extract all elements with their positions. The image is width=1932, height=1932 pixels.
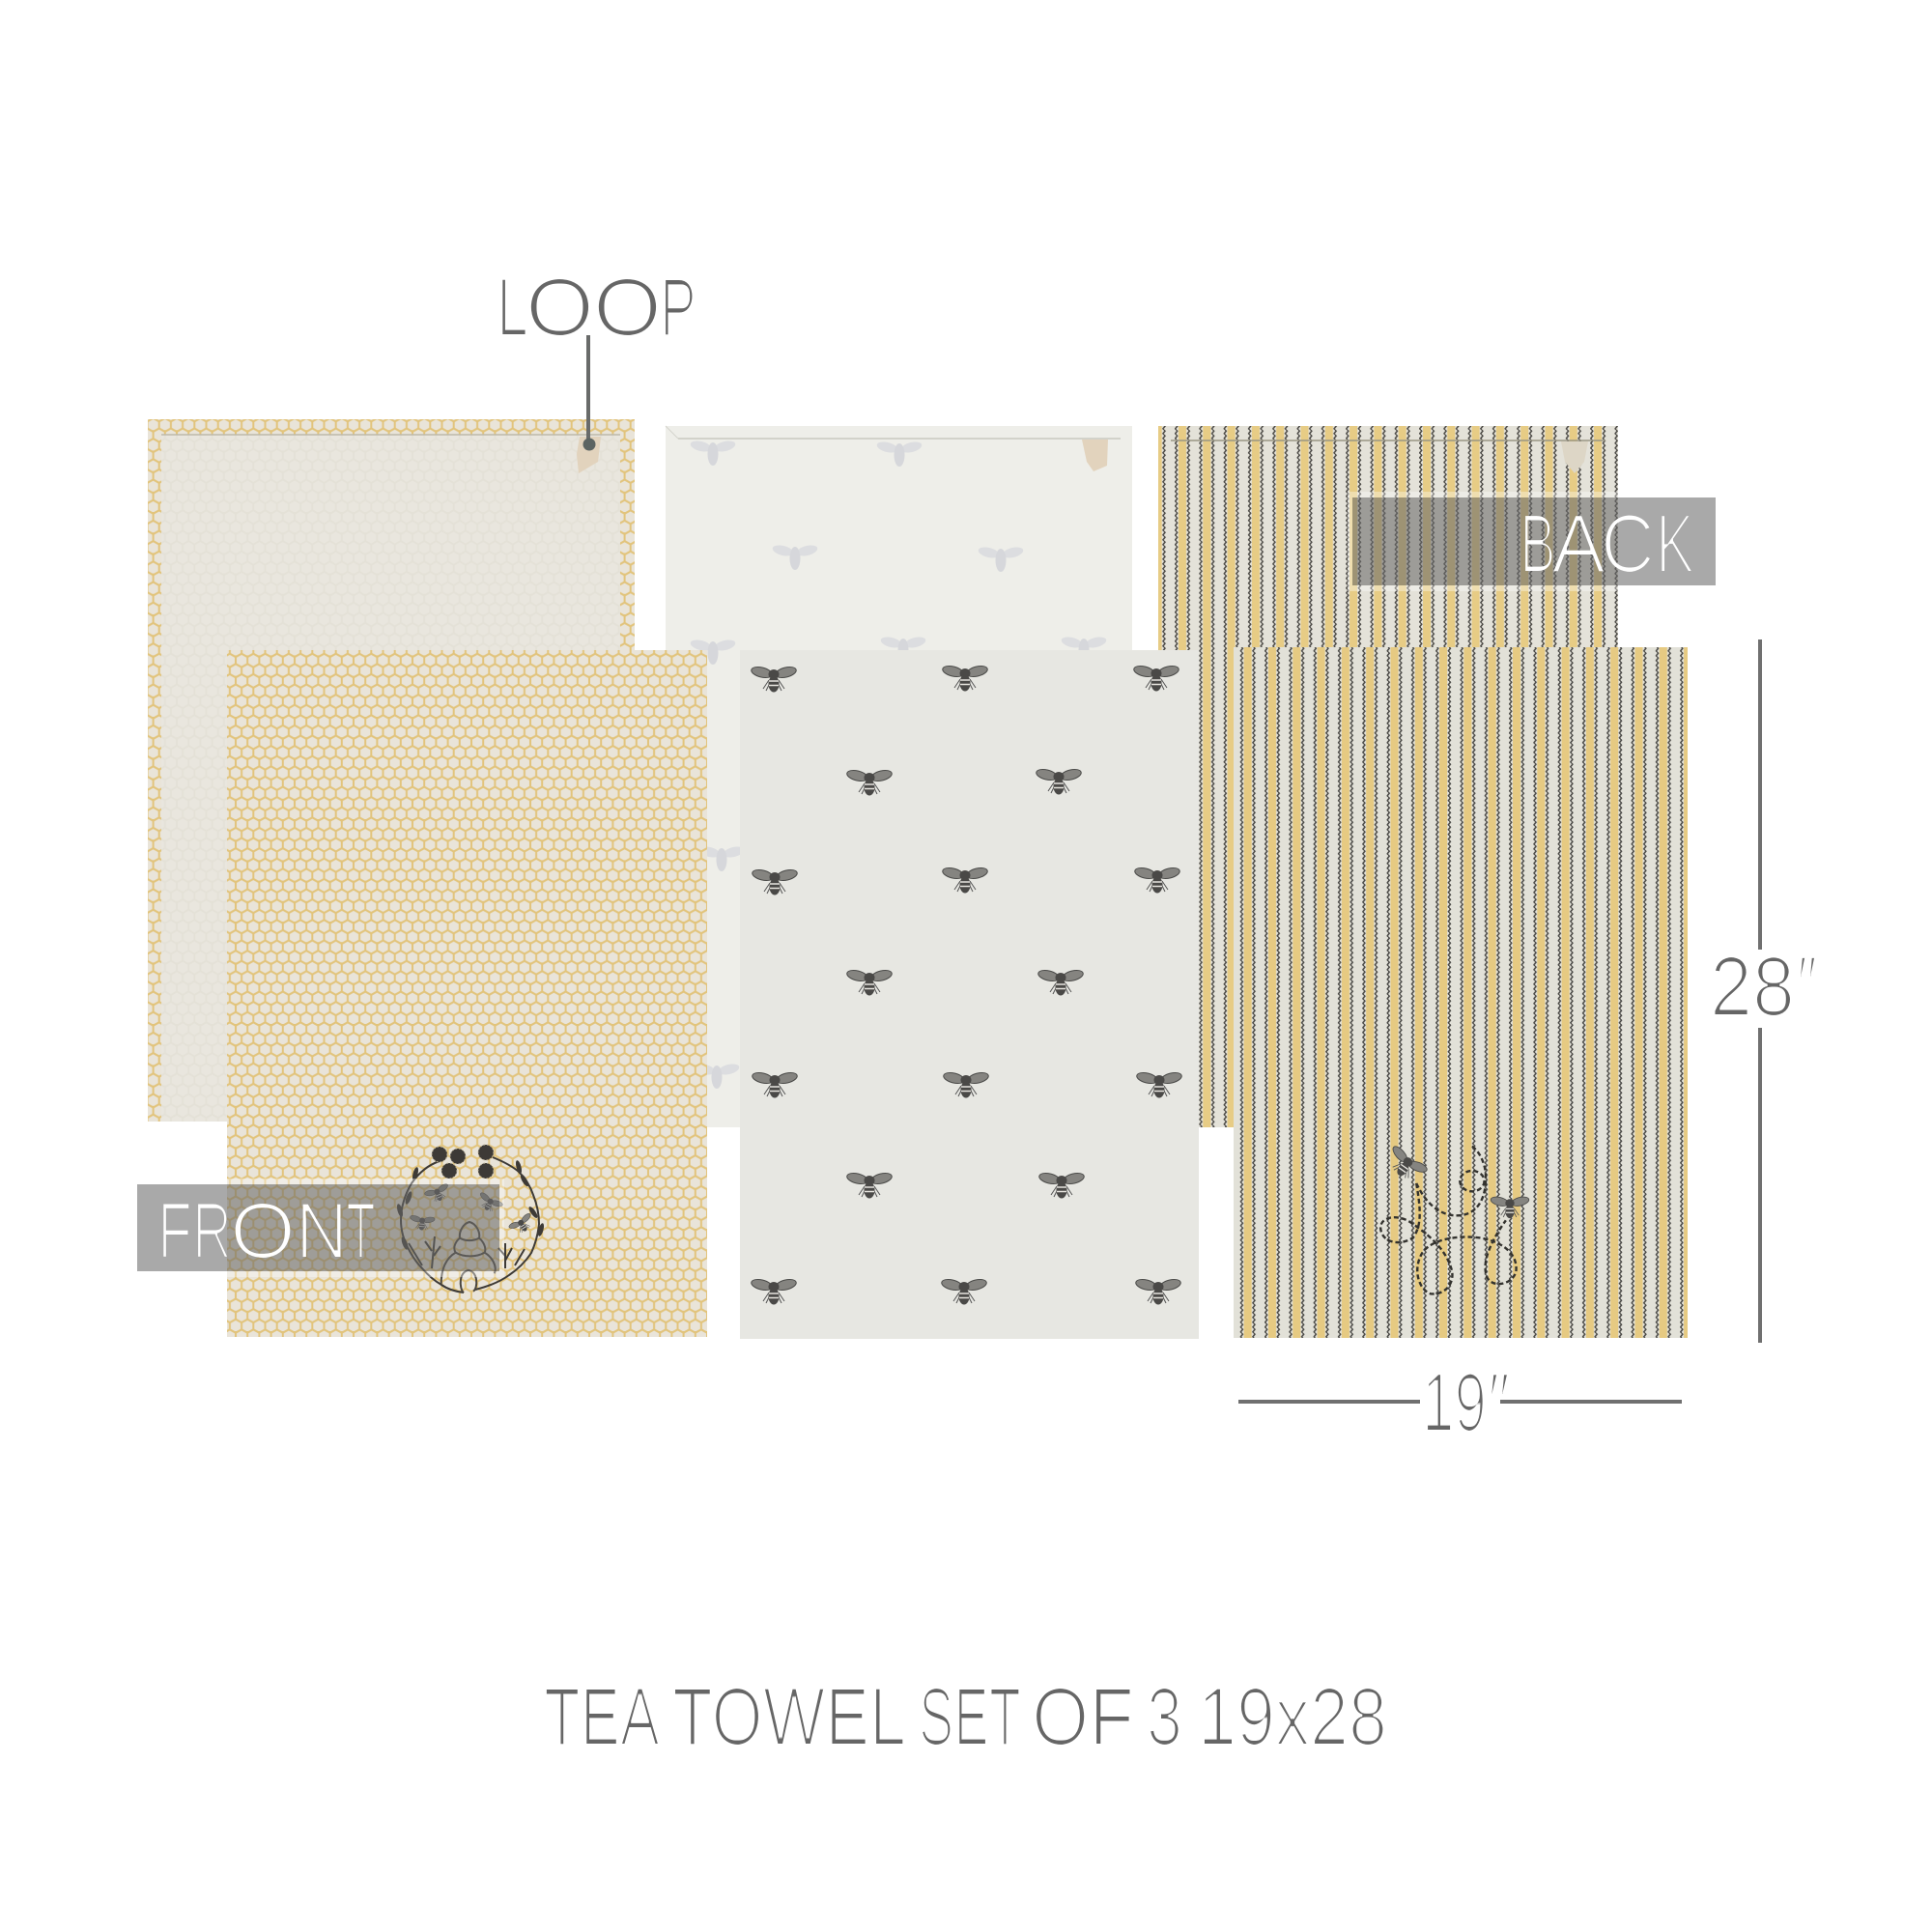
icon: beehive wreath	[396, 1145, 545, 1293]
dimension: width 19 inches	[1238, 1357, 1682, 1449]
icon: embroidered bee flight trail	[1380, 1146, 1517, 1293]
callout: BACK label: A	[1551, 498, 1605, 590]
title: TOWEL	[672, 1671, 906, 1762]
title	[544, 1671, 1387, 1762]
callout: BACK label: B	[1520, 498, 1556, 590]
callout: LOOP label: L	[497, 262, 528, 353]
callout: FRONT label	[132, 1179, 504, 1277]
callout: LOOP label	[497, 262, 696, 450]
icon: beehive	[441, 1222, 496, 1293]
callout: BACK label	[1348, 492, 1720, 591]
callout: FRONT label: O	[230, 1187, 296, 1275]
icon: hanging loop on striped towel	[1561, 441, 1588, 473]
dimension: height 28 inches: ″	[1797, 940, 1817, 1034]
callout: BACK label: K	[1656, 498, 1694, 590]
title: 19x28	[1198, 1671, 1387, 1762]
arrow: loop leader line	[583, 335, 595, 450]
bee towel back	[666, 426, 1132, 1127]
callout: LOOP label: O	[593, 262, 662, 353]
honeycomb towel back	[148, 419, 635, 1122]
striped towel back	[1158, 426, 1618, 1127]
honeycomb towel front	[227, 650, 707, 1337]
title: TEA	[544, 1671, 660, 1762]
callout: LOOP label: O	[526, 262, 594, 353]
striped towel front	[1234, 647, 1688, 1338]
title: 3	[1147, 1671, 1182, 1762]
icon: hanging loop on bee towel	[1082, 440, 1108, 471]
callout: FRONT label: F	[157, 1187, 192, 1275]
title: SET	[919, 1671, 1021, 1762]
title: OF	[1032, 1671, 1134, 1762]
callout: FRONT label: T	[346, 1187, 376, 1275]
dimension: height 28 inches: 28	[1710, 940, 1795, 1034]
dimension: width 19 inches: ″	[1488, 1357, 1510, 1449]
bee towel front	[740, 650, 1199, 1339]
callout: FRONT label: R	[192, 1187, 232, 1275]
callout: BACK label: C	[1601, 498, 1655, 590]
callout: FRONT label: N	[296, 1187, 348, 1275]
callout: LOOP label: P	[660, 262, 696, 353]
dimension: width 19 inches: 19	[1422, 1357, 1487, 1449]
dimension: height 28 inches	[1710, 639, 1817, 1343]
icon: hanging loop on honeycomb towel	[577, 437, 601, 473]
icon: wreath flowers	[432, 1145, 494, 1179]
